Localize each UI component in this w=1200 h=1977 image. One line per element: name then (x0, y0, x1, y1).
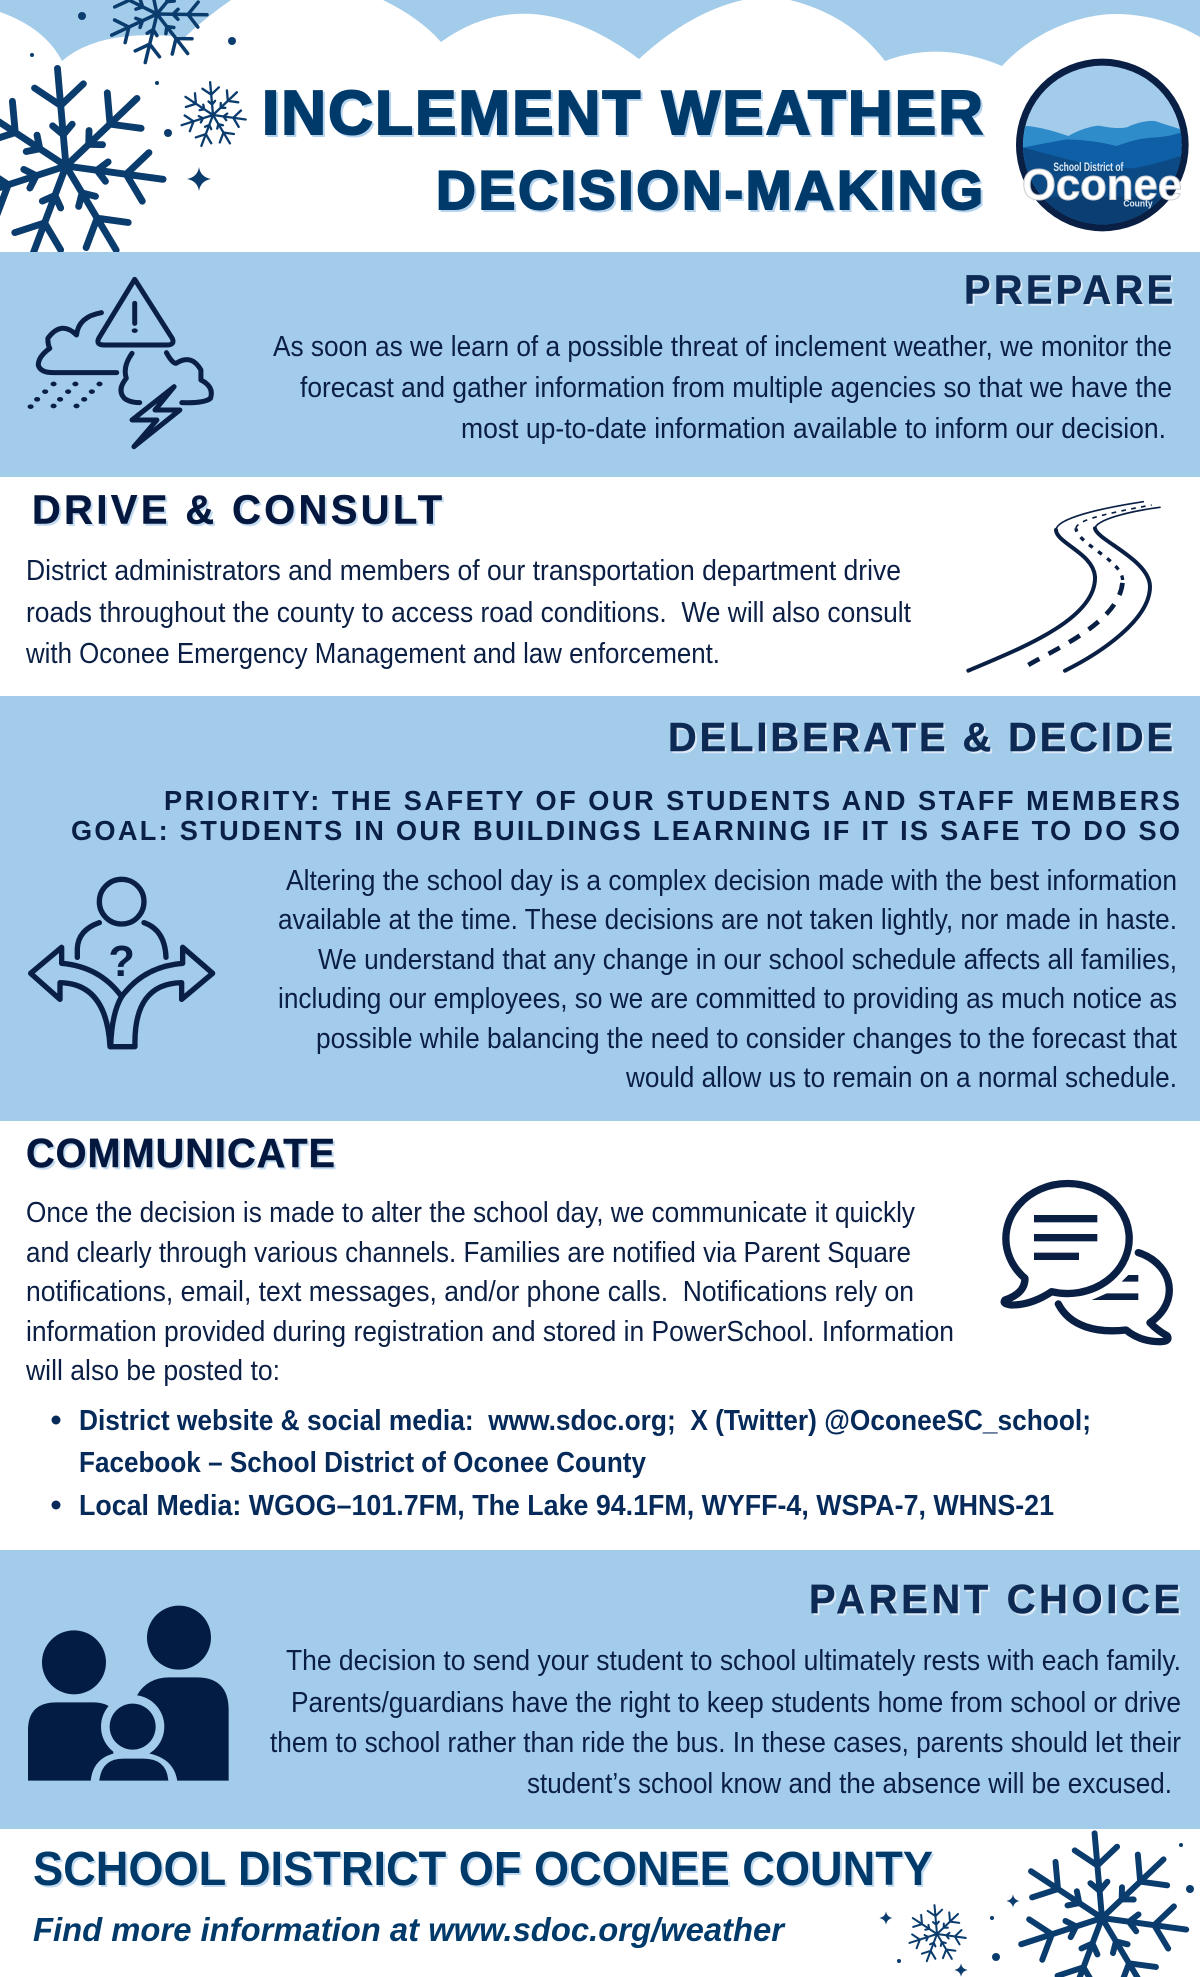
body text: drive and consult: with Oconee Emergency Management and law enforcement. (25, 638, 720, 670)
logo: School District of Oconee County: County (1123, 199, 1153, 209)
icon: storm clouds with warning triangle (28, 279, 211, 447)
heading: drive and consult: DRIVE & CONSULT (32, 488, 443, 533)
logo: School District of Oconee County: School District of (1053, 160, 1124, 174)
heading: parent choice: PARENT CHOICE (809, 1578, 1180, 1622)
body text: prepare (273, 331, 1172, 445)
bulleted list: channels: Local Media: WGOG–101.7FM, The Lake 94.1FM, WYFF-4, WSPA-7, WHNS-21 (79, 1490, 1054, 1522)
body text: communicate: will also be posted to: (25, 1355, 280, 1387)
bulleted list: channels (52, 1405, 1091, 1522)
body text: communicate: Once the decision is made to alter the school day, we communicate it quickly (26, 1197, 916, 1229)
body text: deliberate and decide (278, 865, 1177, 1094)
priority and goal statements (71, 785, 1180, 846)
body text: prepare: most up-to-date information available to inform our decision. (461, 413, 1166, 445)
panel: parent choice (0, 1550, 1200, 1829)
body text: drive and consult: roads throughout the county to access road conditions. We will also consult (26, 597, 911, 629)
bulleted list: channels: Facebook – School District of Oconee County (79, 1447, 646, 1479)
body text: drive and consult (25, 555, 911, 670)
icon: family (28, 1606, 229, 1781)
panel: prepare (0, 252, 1200, 477)
title: DECISION-MAKING (436, 159, 983, 221)
heading: communicate: COMMUNICATE (26, 1132, 335, 1176)
body text: parent choice (270, 1645, 1181, 1800)
priority and goal statements: GOAL: STUDENTS IN OUR BUILDINGS LEARNING IF IT IS SAFE TO DO SO (71, 815, 1180, 846)
heading: prepare: PREPARE (964, 268, 1173, 313)
body text: communicate: notifications, email, text messages, and/or phone calls. Notifications rely on (26, 1276, 914, 1308)
footer panel (0, 1826, 1200, 1977)
title (262, 79, 983, 221)
snowflakes and dots, top left (0, 0, 250, 273)
icon: person at a fork with question mark: ? (108, 938, 135, 986)
footer title: SCHOOL DISTRICT OF OCONEE COUNTY (33, 1843, 933, 1896)
footer link line: Find more information at www.sdoc.org/weather (33, 1911, 786, 1948)
body text: communicate (25, 1197, 954, 1387)
body text: communicate: and clearly through various channels. Families are notified via Parent Square (26, 1237, 911, 1269)
icon: winding road (968, 502, 1160, 671)
priority and goal statements: PRIORITY: THE SAFETY OF OUR STUDENTS AND STAFF MEMBERS (164, 785, 1180, 816)
icon: speech bubbles (1004, 1184, 1169, 1342)
header panel (0, 0, 1200, 273)
cloud scallop sky (0, 0, 1200, 66)
body text: drive and consult: District administrators and members of our transportation department drive (26, 555, 901, 587)
panel: deliberate and decide (0, 696, 1200, 1121)
icon: person at a fork with question mark (31, 879, 213, 1047)
logo: School District of Oconee County (1016, 59, 1189, 240)
bulleted list: channels: District website & social media: www.sdoc.org; X (Twitter) @OconeeSC_school; (79, 1405, 1091, 1437)
title: INCLEMENT WEATHER (262, 79, 983, 148)
heading: deliberate and decide: DELIBERATE & DECIDE (668, 716, 1173, 760)
panel: communicate (0, 1121, 1200, 1550)
logo: School District of Oconee County: Oconee (1022, 161, 1182, 209)
body text: communicate: information provided during registration and stored in PowerSchool. Information (26, 1316, 954, 1348)
snowflakes and dots, bottom right (879, 1826, 1197, 1977)
panel: drive and consult (0, 477, 1200, 696)
